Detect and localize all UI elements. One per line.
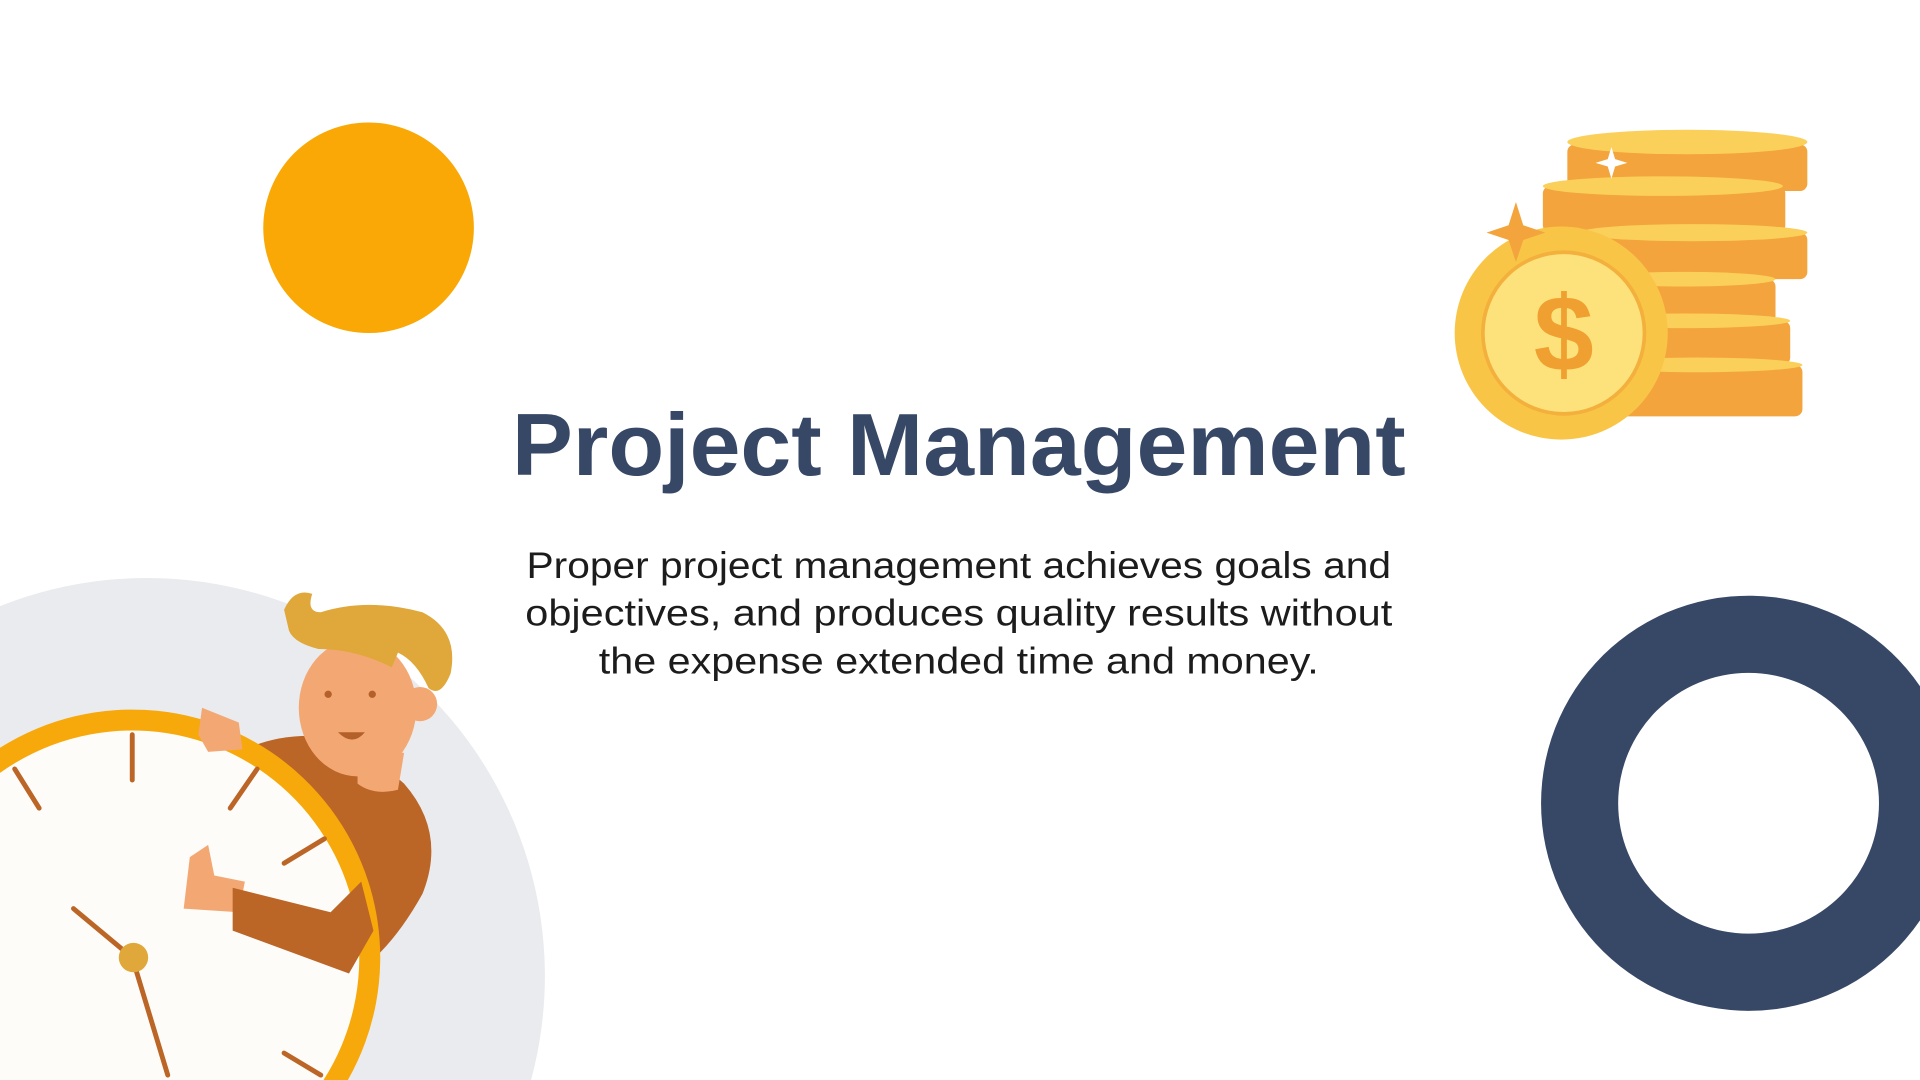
description text: the expense extended time and money.: [599, 640, 1319, 681]
illustration: man with clock: [0, 593, 452, 1080]
clock face: [0, 731, 359, 1080]
hands: [198, 708, 242, 752]
orange circle: [263, 122, 474, 333]
icon: coin stack: [1455, 130, 1807, 440]
hair: [284, 593, 452, 691]
head: [299, 639, 416, 776]
background gray circle: [0, 578, 545, 1080]
neck: [358, 747, 404, 792]
shirt body: [233, 736, 431, 973]
face: [324, 691, 332, 698]
arm: [233, 882, 373, 973]
description text: objectives, and produces quality results without: [525, 593, 1392, 634]
title: Project Management: [512, 395, 1406, 494]
description text: [525, 545, 1392, 681]
navy ring: [1541, 596, 1920, 1011]
clock rim: [0, 710, 380, 1080]
icon: coin stack: $: [1534, 273, 1594, 394]
description text: Proper project management achieves goals and: [527, 545, 1391, 586]
